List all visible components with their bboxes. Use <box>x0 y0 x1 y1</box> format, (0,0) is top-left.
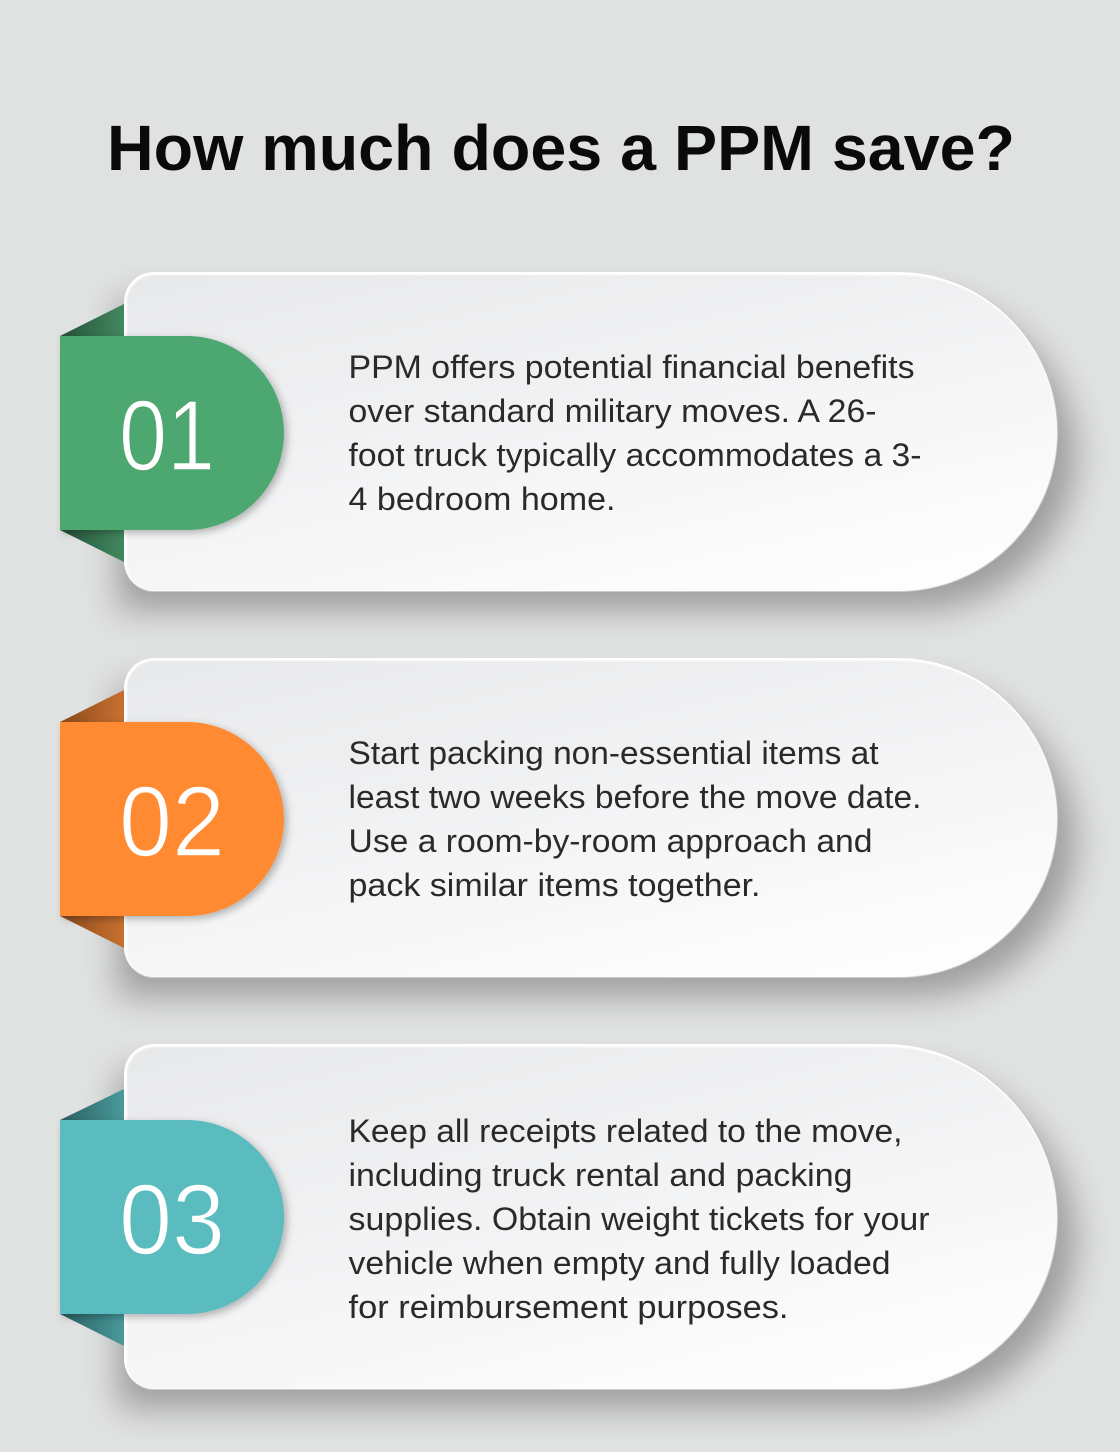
number 02: 02 <box>119 766 225 878</box>
text 1: PPM offers potential financial benefits <box>348 349 914 385</box>
card 3 <box>124 1044 1058 1390</box>
ribbon fold bottom 2 <box>60 916 124 948</box>
number badge 2 <box>60 722 284 916</box>
card shadow 1 <box>118 300 1076 610</box>
text 3: Keep all receipts related to the move, <box>348 1113 902 1149</box>
number badge 1 <box>60 336 284 530</box>
text 2: Start packing non-essential items at <box>348 735 879 771</box>
text 3: for reimbursement purposes. <box>348 1289 788 1325</box>
text 1: foot truck typically accommodates a 3- <box>348 437 922 473</box>
panel: step 3 <box>60 1044 1076 1408</box>
number badge 3 <box>60 1120 284 1314</box>
ribbon fold bottom 3 <box>60 1314 124 1346</box>
text 3: including truck rental and packing <box>348 1157 852 1193</box>
text 3: vehicle when empty and fully loaded <box>348 1245 890 1281</box>
text 1 <box>348 349 922 517</box>
ribbon fold top 3 <box>60 1089 124 1120</box>
card 1 <box>124 272 1058 592</box>
panel: step 1 <box>60 272 1076 610</box>
text 2: least two weeks before the move date. <box>348 779 922 815</box>
text 3 <box>348 1113 930 1325</box>
card shadow 3 <box>118 1072 1076 1408</box>
text 3: supplies. Obtain weight tickets for your <box>348 1201 930 1237</box>
number 03: 03 <box>119 1164 225 1276</box>
panel: step 2 <box>60 658 1076 996</box>
ribbon fold top 1 <box>60 304 124 336</box>
text 2: pack similar items together. <box>348 867 760 903</box>
text 2 <box>348 735 922 903</box>
number 01: 01 <box>119 380 215 492</box>
ribbon fold bottom 1 <box>60 530 124 562</box>
text 2: Use a room-by-room approach and <box>348 823 872 859</box>
text 1: over standard military moves. A 26- <box>348 393 876 429</box>
ribbon fold top 2 <box>60 690 124 722</box>
title: How much does a PPM save? <box>107 112 1015 184</box>
card 2 <box>124 658 1058 978</box>
text 1: 4 bedroom home. <box>348 481 616 517</box>
card shadow 2 <box>118 686 1076 996</box>
